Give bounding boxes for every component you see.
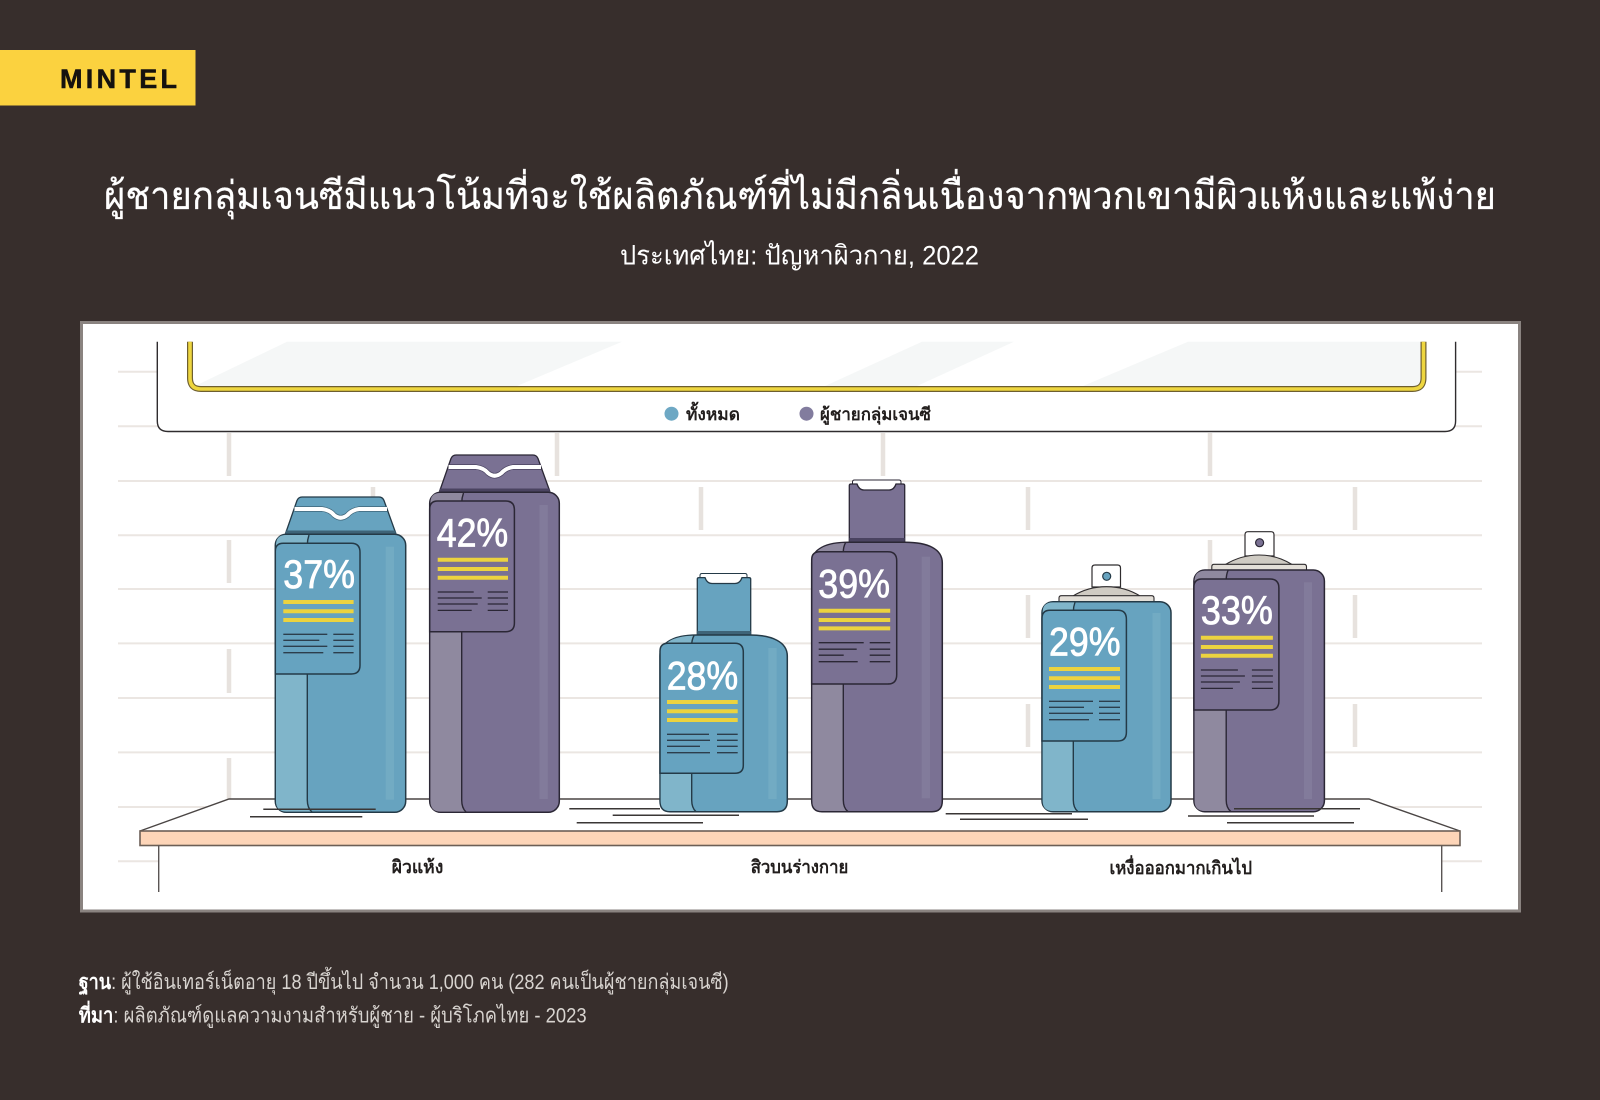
label 29% <box>1042 610 1126 741</box>
label 42% <box>430 501 514 632</box>
bottle: dry skin total 37% <box>275 497 406 812</box>
shelf shadow lines <box>250 809 1360 823</box>
footnote: base: ฐาน: ผู้ใช้อินเทอร์เน็ตอายุ 18 ปีขึ้นไป จำนวน 1,000 คน (282 คนเป็นผู้ชายกลุ่มเจนซี) <box>79 967 729 996</box>
category label: excessive sweat: เหงื่อออกมากเกินไป <box>1110 855 1252 878</box>
legend <box>664 401 931 426</box>
pump cap <box>286 497 396 534</box>
bottle: dry skin gen z 42% <box>430 455 559 812</box>
mirror reflections <box>195 342 1421 386</box>
pump cap <box>440 455 550 492</box>
logo: Mintel: MINTEL <box>60 64 177 94</box>
legend: ผู้ชายกลุ่มเจนซี <box>820 404 931 426</box>
footnote: source: ที่มา: ผลิตภัณฑ์ดูแลความงามสำหรับผู้ชาย - ผู้บริโภคไทย - 2023 <box>79 1000 587 1028</box>
label 39% <box>812 552 897 684</box>
bottle: body acne gen z 39% <box>812 480 942 812</box>
category label: body acne: สิวบนร่างกาย <box>751 857 848 877</box>
wall: brick pattern <box>118 372 1482 861</box>
label 39%: 39% <box>818 562 890 606</box>
spray nozzle <box>1212 532 1306 570</box>
mirror cabinet <box>157 342 1456 432</box>
title: ผู้ชายกลุ่มเจนซีมีแนวโน้มที่จะใช้ผลิตภัณฑ์ที่ไม่มีกลิ่นเนื่องจากพวกเขามีผิวแห้งและแพ้ง่าย <box>104 169 1496 220</box>
mirror frame <box>190 342 1424 389</box>
logo: Mintel <box>0 50 196 106</box>
label 42%: 42% <box>437 512 508 556</box>
label 33% <box>1194 579 1279 710</box>
legend: ทั้งหมด <box>686 401 740 424</box>
subtitle: ประเทศไทย: ปัญหาผิวกาย, 2022 <box>620 240 979 270</box>
label 37%: 37% <box>283 553 355 597</box>
category label: dry skin: ผิวแห้ง <box>391 857 443 877</box>
shelf <box>140 799 1460 892</box>
can: excessive sweat total 29% <box>1042 565 1171 812</box>
spray nozzle <box>1059 565 1154 602</box>
flip cap <box>697 574 751 635</box>
bottle: body acne total 28% <box>660 574 787 812</box>
label 28% <box>660 643 743 773</box>
label 29%: 29% <box>1049 621 1120 665</box>
label 28%: 28% <box>667 654 738 698</box>
flip cap <box>849 480 905 542</box>
panel: shelf illustration <box>82 322 1520 911</box>
label 33%: 33% <box>1201 589 1273 633</box>
can: excessive sweat gen z 33% <box>1194 532 1324 812</box>
label 37% <box>275 543 360 674</box>
